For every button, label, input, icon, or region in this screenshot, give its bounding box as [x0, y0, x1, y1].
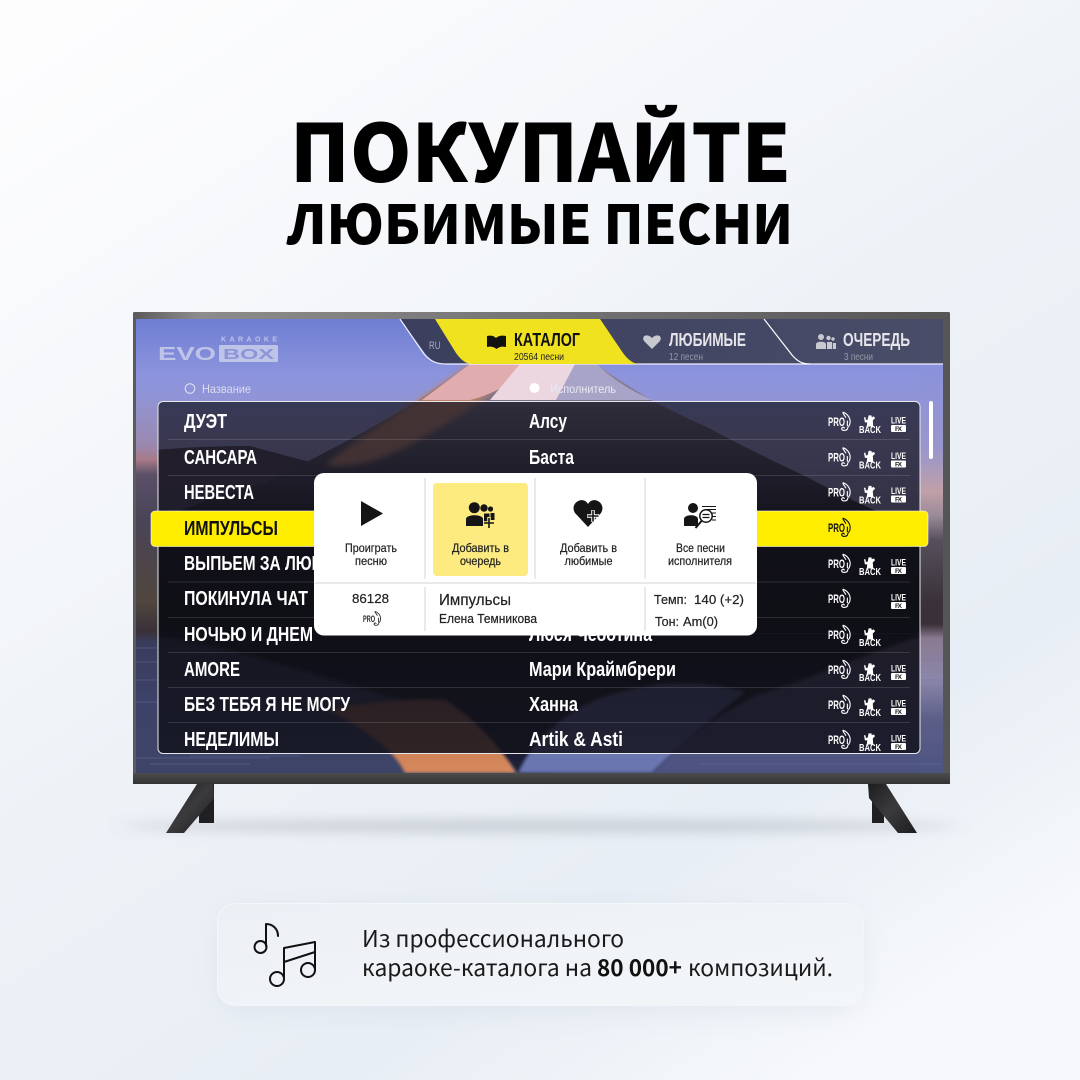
tempo: Темп: [654, 592, 687, 607]
tv screen [136, 319, 943, 773]
song titles [184, 411, 357, 751]
tab bar [400, 319, 943, 364]
icon: play [361, 501, 383, 526]
row feature icons: BACK [859, 743, 882, 754]
song titles: БЕЗ ТЕБЯ Я НЕ МОГУ [184, 694, 350, 716]
song titles: САНСАРА [184, 447, 257, 469]
row feature icons: PRO [828, 415, 845, 429]
label: play: песню [355, 556, 387, 568]
tv stand legs [166, 784, 917, 833]
tabs background [400, 319, 943, 364]
icon: add to favorites [574, 500, 602, 527]
row feature icons: PRO [828, 557, 845, 571]
row feature icons: FX [895, 674, 903, 681]
icon: all artist songs [684, 503, 716, 528]
row feature icons: FX [895, 496, 903, 504]
icon: book [487, 336, 506, 349]
water streaks [136, 648, 943, 764]
logo: EVO [158, 344, 216, 364]
song titles: ВЫПЬЕМ ЗА ЛЮБОВЬ [184, 553, 357, 575]
title [286, 90, 793, 260]
artists: Алсу [529, 411, 568, 433]
label: play: Проиграть [345, 543, 397, 555]
song name: Импульсы [439, 592, 511, 609]
row feature icons: PRO [828, 698, 845, 712]
label: add to favorites: Добавить в [560, 543, 617, 555]
tempo: 140 (+2) [694, 592, 744, 607]
label: add to queue: Добавить в [452, 543, 509, 555]
label: add to favorites: любимые [564, 556, 612, 568]
logo: BOX [223, 346, 274, 363]
card text line 2 [362, 949, 833, 983]
row feature icons: LIVE [891, 664, 906, 674]
active tab: catalog [435, 319, 640, 364]
floor shadow [120, 820, 960, 832]
song titles: ДУЭТ [184, 411, 227, 433]
row feature icons: FX [895, 744, 903, 751]
row feature icons: FX [895, 462, 903, 468]
row feature icons: BACK [859, 425, 882, 436]
row feature icons: LIVE [891, 558, 906, 568]
card text line 1: Из профессионального [362, 920, 624, 954]
search mode radios: Исполнитель [550, 382, 616, 396]
row feature icons: PRO [828, 628, 845, 642]
row feature icons: PRO [828, 733, 845, 747]
row feature icons: PRO [828, 663, 845, 677]
logo [158, 336, 278, 364]
key: Тон: [655, 614, 679, 629]
side strips [136, 408, 158, 639]
song titles: ПОКИНУЛА ЧАТ [184, 588, 308, 610]
row feature icons: LIVE [891, 592, 906, 602]
row feature icons: BACK [859, 460, 882, 472]
card text line 2: композиций. [688, 949, 833, 983]
catalog count: 20564 песни [514, 352, 564, 363]
favorites label: ЛЮБИМЫЕ [669, 330, 746, 350]
orange reflection [327, 699, 516, 773]
song titles: НЕДЕЛИМЫ [184, 729, 279, 751]
song titles: ИМПУЛЬСЫ [184, 518, 278, 540]
row feature icons: LIVE [891, 416, 906, 426]
card text line 2: 80 000+ [597, 949, 682, 983]
key [655, 614, 718, 629]
icon: heart [643, 335, 661, 349]
language label: RU [429, 340, 441, 352]
row feature icons: FX [895, 568, 903, 575]
shoreline forest [136, 600, 943, 634]
artists [529, 411, 676, 751]
lit left face [325, 364, 505, 466]
search mode radios [184, 383, 616, 394]
row feature icons: FX [895, 603, 903, 610]
row feature icons: FX [895, 426, 903, 433]
song number: 86128 [352, 591, 389, 606]
artist name: Елена Темникова [439, 611, 538, 626]
catalog label: КАТАЛОГ [514, 330, 580, 350]
key: Am(0) [683, 614, 718, 629]
snow cap highlights [422, 364, 520, 400]
tab outlines [400, 319, 943, 364]
main mountain [158, 364, 920, 600]
pro badge: PRO [363, 614, 375, 624]
song titles: AMORE [184, 659, 240, 681]
tv bezel [133, 312, 950, 784]
row feature icons: PRO [828, 521, 845, 535]
row feature icons: BACK [859, 567, 882, 578]
far ridge left [158, 446, 308, 511]
favorites count: 12 песен [669, 352, 703, 363]
artists: Люся Чеботина [529, 624, 653, 646]
row feature icons: BACK [859, 496, 882, 506]
card text line 2: караоке-каталога на [362, 949, 592, 983]
search mode radios: Название [202, 382, 251, 396]
highlighted row [151, 511, 928, 546]
icon: people [816, 334, 836, 349]
artists: Ханна [529, 694, 579, 716]
icon: music notes [254, 924, 315, 986]
song titles: НЕВЕСТА [184, 482, 254, 504]
queue label: ОЧЕРЕДЬ [843, 330, 910, 350]
wallpaper: mountain landscape [136, 319, 943, 773]
snow reflection [518, 683, 745, 773]
label: play [346, 543, 397, 566]
catalog table [158, 402, 920, 754]
row feature icons: PRO [828, 486, 845, 500]
row feature icons: LIVE [891, 451, 906, 461]
popup dialog [314, 473, 757, 636]
row feature icons: LIVE [891, 486, 906, 496]
label: all artist songs: исполнителя [668, 556, 732, 568]
mountain reflection [158, 633, 930, 773]
pro badge [363, 611, 381, 625]
row feature icons: LIVE [891, 698, 906, 708]
label: all artist songs [668, 543, 732, 568]
title line 1: ПОКУПАЙТЕ [290, 90, 791, 206]
song titles: НОЧЬЮ И ДНЕМ [184, 624, 313, 646]
row feature icons: LIVE [891, 734, 906, 744]
row feature icons: FX [895, 709, 903, 716]
label: add to queue: очередь [460, 556, 501, 568]
scrollbar [929, 401, 933, 459]
title line 2: ЛЮБИМЫЕ ПЕСНИ [286, 181, 793, 260]
water [136, 633, 556, 773]
row feature icons: BACK [859, 638, 882, 649]
label: add to favorites [560, 543, 617, 568]
action highlight [433, 483, 528, 576]
row feature icons: PRO [828, 450, 845, 464]
row feature icons [828, 412, 906, 754]
info card [218, 904, 864, 1008]
artists: Artik & Asti [529, 729, 623, 751]
tempo [654, 592, 744, 607]
row feature icons: BACK [859, 673, 882, 684]
logo: KARAOKE [221, 336, 277, 344]
row feature icons: PRO [828, 592, 845, 606]
icon: add to queue [466, 502, 495, 529]
label: all artist songs: Все песни [676, 543, 725, 555]
artists: Баста [529, 447, 575, 469]
label: add to queue [452, 543, 509, 568]
artists: Мари Краймбрери [529, 659, 676, 681]
queue count: 3 песни [844, 352, 873, 363]
row feature icons: BACK [859, 708, 882, 719]
